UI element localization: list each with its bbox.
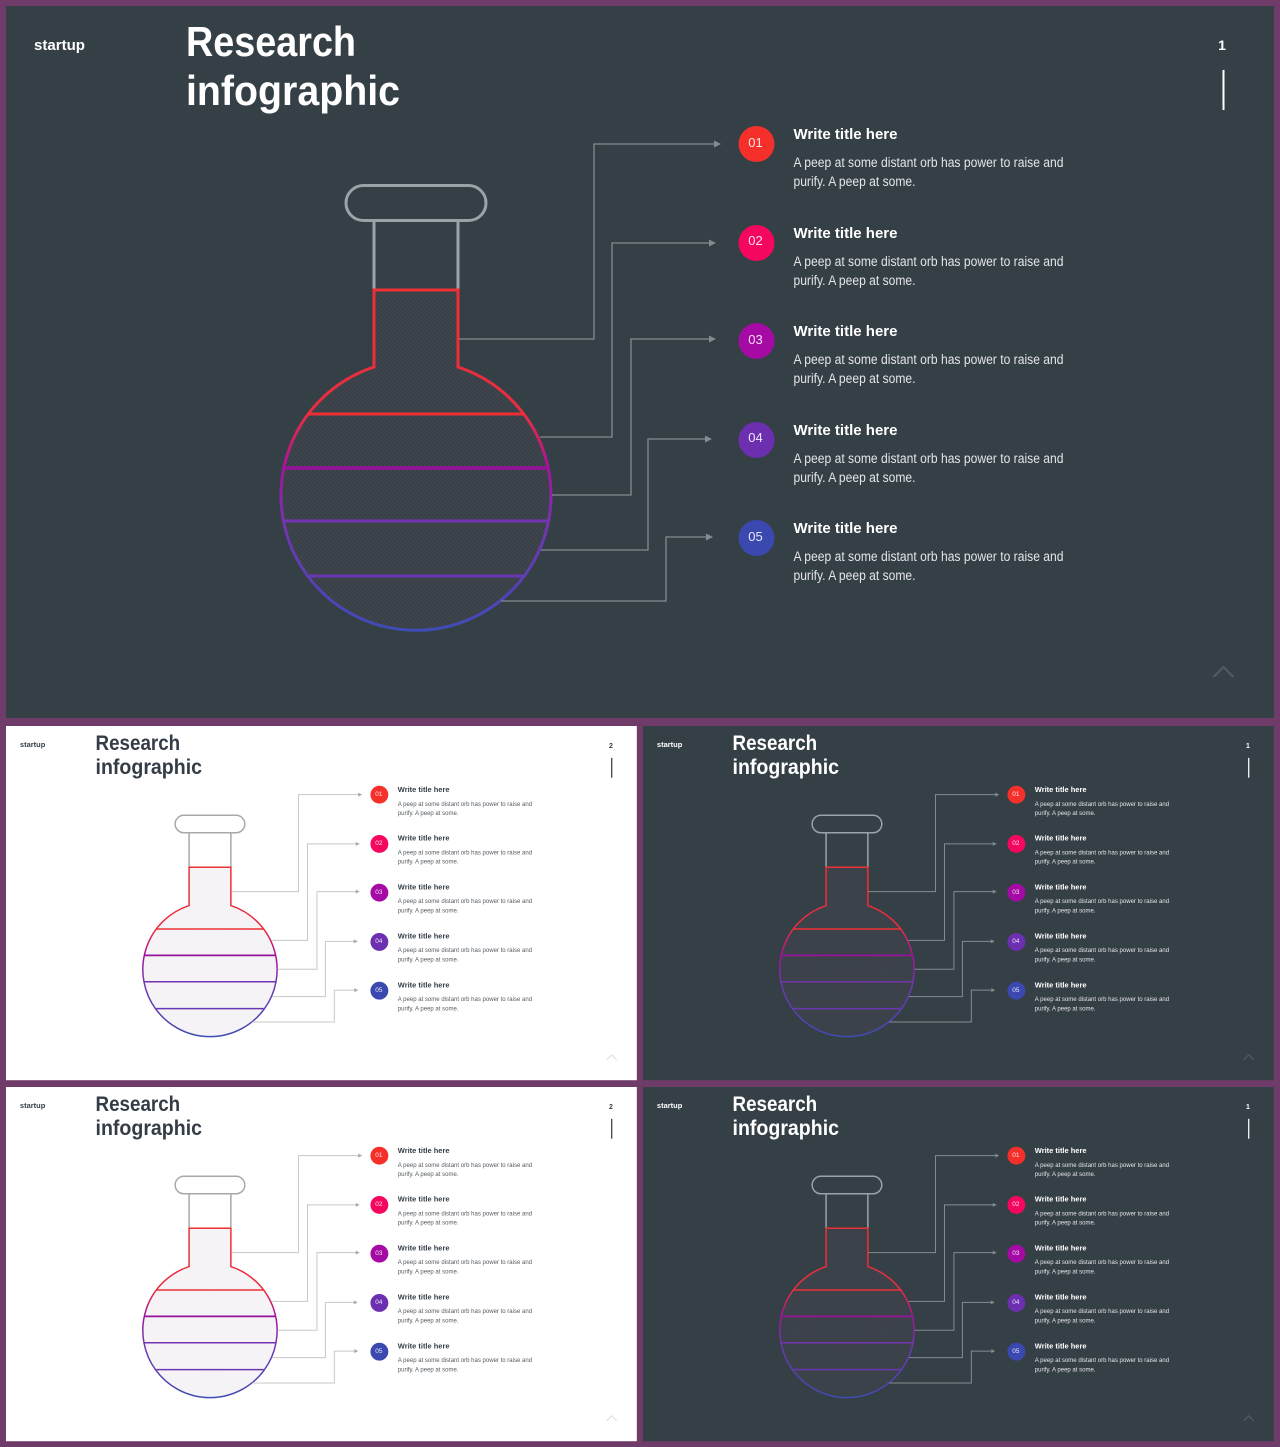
page number: 1: [1246, 743, 1250, 750]
list item 05: 05: [375, 987, 383, 994]
list item 05: purify. A peep at some.: [1035, 1366, 1096, 1373]
list item 03: [1007, 1243, 1169, 1275]
list item 04: A peep at some distant orb has power to raise and: [398, 947, 532, 954]
flask illustration: [143, 815, 277, 1037]
list item 02: purify. A peep at some.: [1035, 1220, 1096, 1227]
list item 02: purify. A peep at some.: [398, 859, 459, 866]
list item 03: purify. A peep at some.: [398, 1268, 459, 1275]
title: infographic: [186, 67, 400, 114]
list item 05: purify. A peep at some.: [794, 568, 916, 583]
list item 01: purify. A peep at some.: [398, 810, 459, 817]
list item 01: purify. A peep at some.: [398, 1171, 459, 1178]
list item 02: A peep at some distant orb has power to raise and: [398, 849, 532, 856]
title: [96, 1093, 202, 1140]
list item 02: purify. A peep at some.: [794, 273, 916, 288]
title: [733, 732, 839, 779]
list item 03: Write title here: [1035, 1243, 1087, 1252]
list item 01: Write title here: [1035, 785, 1087, 794]
panel: small light slide bottom left: [6, 1087, 637, 1441]
list item 05: A peep at some distant orb has power to raise and: [794, 549, 1064, 564]
list item 01: [370, 1146, 532, 1178]
list item 01: [1007, 785, 1169, 817]
brand label: startup: [20, 1101, 46, 1110]
list item 04: [1007, 931, 1169, 963]
list item 02: 02: [375, 840, 383, 847]
flask illustration: [780, 815, 914, 1037]
list item 02: 02: [1012, 840, 1020, 847]
panel: small dark slide top right: [643, 726, 1274, 1080]
page number: [609, 743, 613, 778]
title: [733, 1093, 839, 1140]
list item 05: [1007, 1341, 1169, 1373]
list item 05: purify. A peep at some.: [398, 1005, 459, 1012]
list item 01: A peep at some distant orb has power to raise and: [398, 801, 532, 808]
icon: up chevron: [1214, 667, 1234, 677]
list item 02: Write title here: [398, 1195, 450, 1204]
list item 02: Write title here: [794, 226, 898, 242]
title: [186, 18, 400, 114]
list item 03: [370, 1243, 532, 1275]
panel: small light slide top left: [6, 726, 637, 1080]
list item 05: A peep at some distant orb has power to raise and: [1035, 996, 1169, 1003]
list item 04: A peep at some distant orb has power to raise and: [1035, 1308, 1169, 1315]
list item 01: purify. A peep at some.: [1035, 810, 1096, 817]
list item 02: [1007, 834, 1169, 866]
list item 04: [738, 422, 1064, 485]
list item 03: A peep at some distant orb has power to raise and: [1035, 898, 1169, 905]
list item 04: [1007, 1292, 1169, 1324]
page number: 2: [609, 1104, 613, 1111]
list item 03: Write title here: [794, 324, 898, 340]
list item 01: 01: [748, 135, 763, 150]
list item 01: Write title here: [398, 1146, 450, 1155]
page number: [609, 1104, 613, 1139]
list item 03: A peep at some distant orb has power to raise and: [794, 352, 1064, 367]
page number: [1246, 1104, 1250, 1139]
list item 05: 05: [1012, 987, 1020, 994]
connector arrows: [231, 793, 362, 1022]
list item 04: purify. A peep at some.: [1035, 1317, 1096, 1324]
list item 05: Write title here: [398, 980, 450, 989]
list item 04: 04: [1012, 938, 1020, 945]
list item 03: [738, 323, 1064, 386]
list item 02: purify. A peep at some.: [398, 1220, 459, 1227]
list item 05: Write title here: [1035, 1341, 1087, 1350]
list item 01: 01: [1012, 791, 1020, 798]
list item 03: A peep at some distant orb has power to raise and: [1035, 1259, 1169, 1266]
list item 03: Write title here: [398, 1243, 450, 1252]
list item 02: Write title here: [1035, 1195, 1087, 1204]
list item 01: A peep at some distant orb has power to raise and: [1035, 801, 1169, 808]
list item 01: [370, 785, 532, 817]
list item 04: 04: [375, 938, 383, 945]
list item 03: Write title here: [1035, 882, 1087, 891]
list item 02: Write title here: [1035, 834, 1087, 843]
list item 05: Write title here: [398, 1341, 450, 1350]
list item 04: 04: [748, 430, 763, 445]
page number: [1218, 37, 1226, 110]
title: Research: [96, 732, 180, 755]
list item 01: purify. A peep at some.: [1035, 1171, 1096, 1178]
list item 01: [738, 126, 1064, 189]
list item 01: 01: [375, 791, 383, 798]
list item 02: A peep at some distant orb has power to raise and: [1035, 849, 1169, 856]
list item 04: purify. A peep at some.: [398, 956, 459, 963]
icon: up chevron: [607, 1416, 617, 1421]
title: infographic: [96, 1117, 202, 1140]
title: Research: [733, 1093, 817, 1116]
title: Research: [733, 732, 817, 755]
list item 05: [370, 1341, 532, 1373]
list item 05: A peep at some distant orb has power to raise and: [1035, 1357, 1169, 1364]
list item 03: A peep at some distant orb has power to raise and: [398, 1259, 532, 1266]
flask illustration: [780, 1176, 914, 1398]
connector arrows: [231, 1154, 362, 1383]
connector arrows: [868, 793, 999, 1022]
list item 03: 03: [1012, 1250, 1020, 1257]
list item 02: purify. A peep at some.: [1035, 859, 1096, 866]
list item 01: 01: [1012, 1152, 1020, 1159]
list item 04: Write title here: [1035, 1292, 1087, 1301]
list item 03: 03: [375, 1250, 383, 1257]
icon: up chevron: [1244, 1416, 1254, 1421]
list item 03: 03: [748, 332, 763, 347]
list item 03: purify. A peep at some.: [398, 907, 459, 914]
list item 01: 01: [375, 1152, 383, 1159]
list item 04: Write title here: [1035, 931, 1087, 940]
list item 04: purify. A peep at some.: [794, 470, 916, 485]
list item 02: [1007, 1195, 1169, 1227]
list item 04: purify. A peep at some.: [1035, 956, 1096, 963]
list item 04: Write title here: [794, 423, 898, 439]
list item 02: [370, 1195, 532, 1227]
list item 04: Write title here: [398, 1292, 450, 1301]
list item 05: A peep at some distant orb has power to raise and: [398, 996, 532, 1003]
list item 04: A peep at some distant orb has power to raise and: [398, 1308, 532, 1315]
brand label: startup: [657, 1101, 683, 1110]
title: [96, 732, 202, 779]
list item 05: [370, 980, 532, 1012]
flask illustration: [143, 1176, 277, 1398]
icon: up chevron: [1244, 1055, 1254, 1060]
list item 05: Write title here: [1035, 980, 1087, 989]
list item 05: 05: [375, 1348, 383, 1355]
list item 05: purify. A peep at some.: [398, 1366, 459, 1373]
list item 01: [1007, 1146, 1169, 1178]
list item 01: A peep at some distant orb has power to raise and: [1035, 1162, 1169, 1169]
brand label: startup: [657, 740, 683, 749]
page number: 2: [609, 743, 613, 750]
panel: main dark slide: [6, 6, 1274, 718]
list item 05: purify. A peep at some.: [1035, 1005, 1096, 1012]
list item 03: [370, 882, 532, 914]
list item 04: purify. A peep at some.: [398, 1317, 459, 1324]
list item 02: [738, 225, 1064, 288]
title: infographic: [733, 756, 839, 779]
flask illustration: [281, 186, 551, 630]
page number: 1: [1246, 1104, 1250, 1111]
list item 05: 05: [1012, 1348, 1020, 1355]
list item 04: Write title here: [398, 931, 450, 940]
list item 02: A peep at some distant orb has power to raise and: [398, 1210, 532, 1217]
list item 05: Write title here: [794, 521, 898, 537]
list item 03: Write title here: [398, 882, 450, 891]
list item 01: Write title here: [398, 785, 450, 794]
list item 03: purify. A peep at some.: [794, 371, 916, 386]
list item 02: A peep at some distant orb has power to raise and: [1035, 1210, 1169, 1217]
list item 05: [1007, 980, 1169, 1012]
list item 04: 04: [375, 1299, 383, 1306]
list item 05: [738, 520, 1064, 583]
list item 01: A peep at some distant orb has power to raise and: [398, 1162, 532, 1169]
list item 04: [370, 931, 532, 963]
list item 02: 02: [1012, 1201, 1020, 1208]
icon: up chevron: [607, 1055, 617, 1060]
list item 02: A peep at some distant orb has power to raise and: [794, 254, 1064, 269]
brand label: startup: [34, 38, 85, 54]
list item 03: purify. A peep at some.: [1035, 1268, 1096, 1275]
title: Research: [96, 1093, 180, 1116]
list item 02: 02: [375, 1201, 383, 1208]
list item 05: 05: [748, 529, 763, 544]
title: infographic: [96, 756, 202, 779]
list item 05: A peep at some distant orb has power to raise and: [398, 1357, 532, 1364]
list item 03: 03: [1012, 889, 1020, 896]
list item 01: Write title here: [1035, 1146, 1087, 1155]
list item 04: A peep at some distant orb has power to raise and: [794, 451, 1064, 466]
connector arrows: [868, 1154, 999, 1383]
list item 02: [370, 834, 532, 866]
brand label: startup: [20, 740, 46, 749]
title: infographic: [733, 1117, 839, 1140]
list item 03: purify. A peep at some.: [1035, 907, 1096, 914]
connector arrows: [459, 140, 721, 601]
list item 03: [1007, 882, 1169, 914]
list item 04: A peep at some distant orb has power to raise and: [1035, 947, 1169, 954]
page number: [1246, 743, 1250, 778]
list item 03: 03: [375, 889, 383, 896]
list item 02: 02: [748, 233, 763, 248]
list item 03: A peep at some distant orb has power to raise and: [398, 898, 532, 905]
list item 01: A peep at some distant orb has power to raise and: [794, 155, 1064, 170]
title: Research: [186, 18, 356, 65]
list item 01: Write title here: [794, 127, 898, 143]
list item 04: [370, 1292, 532, 1324]
list item 01: purify. A peep at some.: [794, 174, 916, 189]
panel: small dark slide bottom right: [643, 1087, 1274, 1441]
list item 04: 04: [1012, 1299, 1020, 1306]
list item 02: Write title here: [398, 834, 450, 843]
page number: 1: [1218, 37, 1226, 53]
